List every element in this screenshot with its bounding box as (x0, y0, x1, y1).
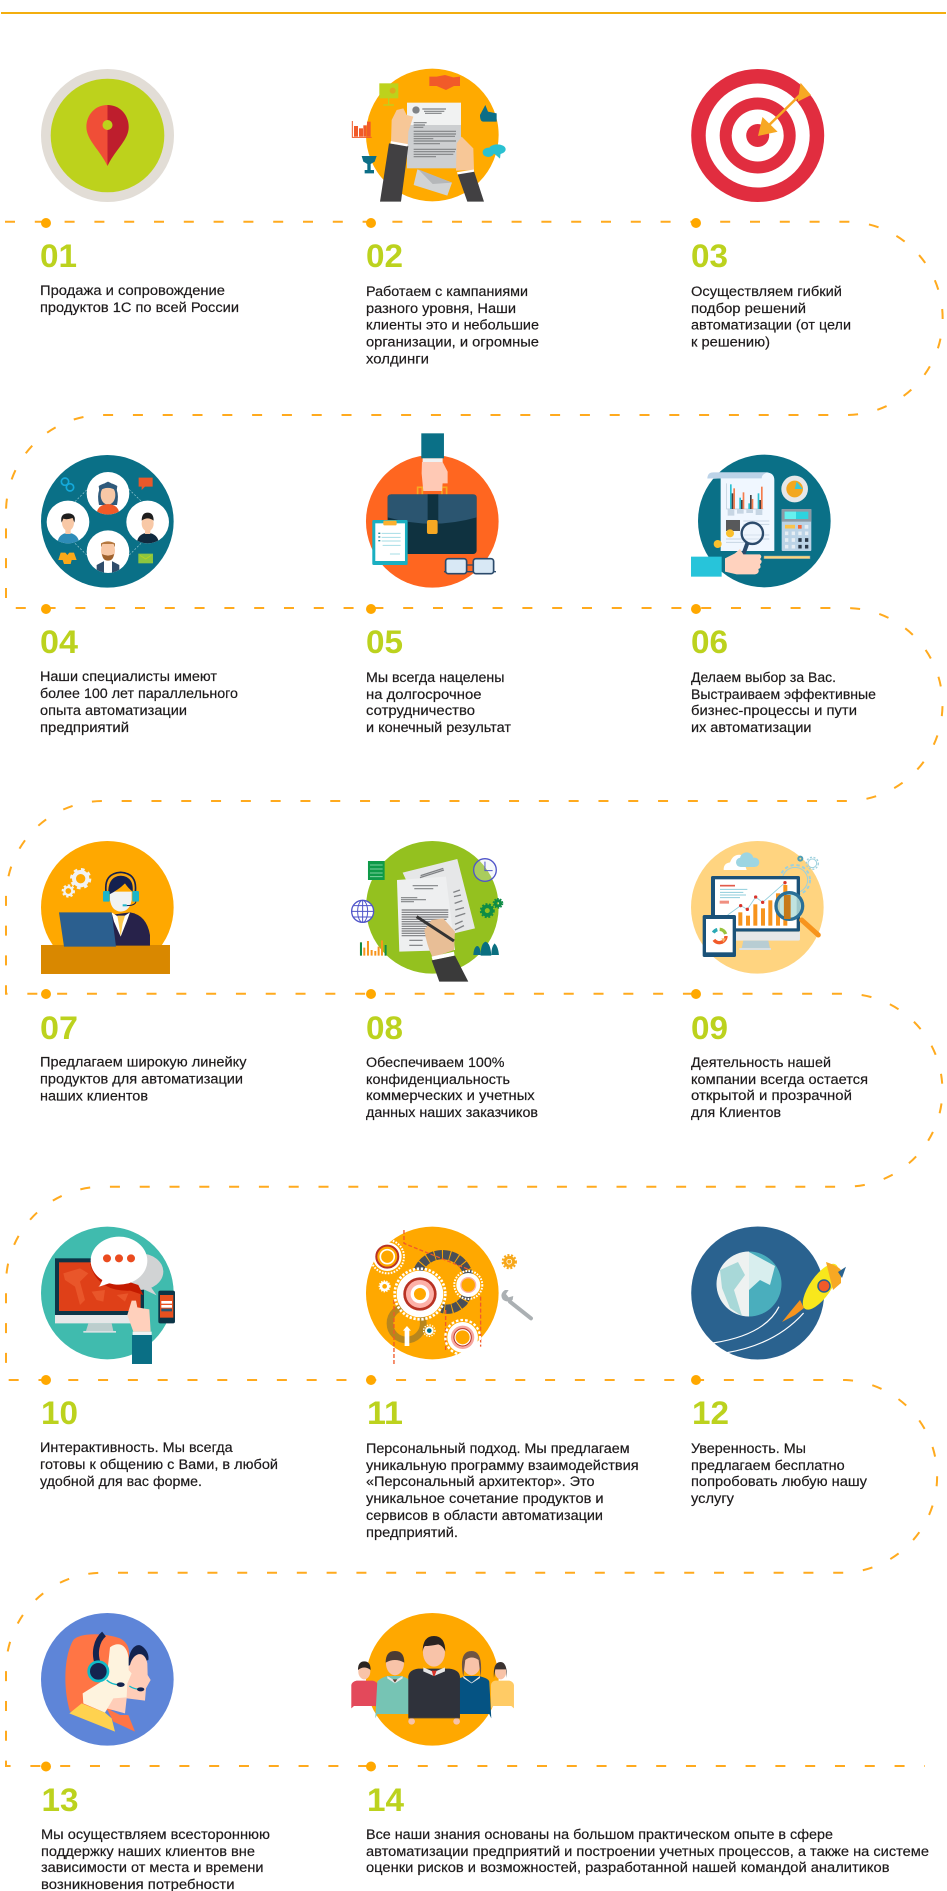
text block: наших клиентов (40, 1088, 148, 1103)
timeline dot (41, 1375, 51, 1385)
icon: map pin (41, 69, 174, 202)
number: 11 (367, 1395, 403, 1431)
text block: продуктов 1С по всей России (40, 300, 239, 315)
text block: готовы к общению с Вами, в любой (40, 1457, 278, 1472)
panel: item 10 (40, 1227, 278, 1489)
text block (366, 1441, 639, 1540)
text block: для Клиентов (691, 1105, 781, 1120)
timeline dot (691, 989, 701, 999)
text block: и конечный результат (366, 720, 511, 735)
text block: холдинги (366, 352, 429, 366)
timeline dot (366, 604, 376, 614)
icon: contract signing (352, 841, 503, 982)
panel: item 03 (691, 69, 851, 350)
text block: Персональный подход. Мы предлагаем (366, 1441, 630, 1456)
number: 06 (691, 624, 728, 660)
text block: предприятий. (366, 1525, 458, 1540)
text block: Уверенность. Мы (691, 1441, 806, 1456)
icon: analytics report (691, 455, 831, 587)
text block: их автоматизации (691, 720, 812, 735)
text block (366, 1055, 538, 1120)
text block (691, 284, 851, 350)
text block (691, 1055, 868, 1120)
text block: Осуществляем гибкий (691, 284, 842, 299)
text block: сотрудничество (366, 703, 475, 718)
text block: сервисов в области автоматизации (366, 1508, 603, 1523)
text block: уникальное сочетание продуктов и (366, 1491, 604, 1506)
panel: item 06 (691, 455, 876, 735)
icon: document in hands (352, 69, 506, 202)
number: 12 (692, 1395, 729, 1431)
text block: Предлагаем широкую линейку (40, 1054, 247, 1069)
icon: globe and rocket (691, 1226, 846, 1360)
number: 13 (42, 1782, 78, 1818)
number: 02 (366, 238, 403, 274)
icon: briefcase (366, 433, 499, 588)
text block: Работаем с кампаниями (366, 284, 528, 299)
text block (40, 1440, 278, 1489)
text block (40, 669, 238, 735)
text block: открытой и прозрачной (691, 1088, 852, 1103)
text block: Интерактивность. Мы всегда (40, 1440, 233, 1455)
text block: Продажа и сопровождение (40, 283, 225, 298)
number: 05 (366, 624, 403, 660)
text block: компании всегда остается (691, 1072, 868, 1087)
text block: подбор решений (691, 301, 806, 316)
icon: gears (366, 1227, 531, 1365)
panel: item 02 (352, 69, 539, 366)
text block (40, 1054, 247, 1103)
number: 04 (40, 624, 78, 660)
text block: на долгосрочное (366, 687, 482, 702)
panel: item 09 (691, 841, 868, 1120)
text block: автоматизации (от цели (691, 318, 851, 332)
number: 03 (691, 238, 728, 274)
timeline dot (366, 989, 376, 999)
panel: item 01 (40, 69, 239, 315)
text block: предприятий (40, 720, 129, 735)
text block: Делаем выбор за Вас. (691, 670, 836, 685)
panel: item 07 (40, 841, 247, 1103)
icon: interactive chat on monitor (41, 1227, 175, 1364)
number: 14 (367, 1782, 404, 1818)
timeline dot (691, 218, 701, 228)
panel: item 08 (352, 841, 538, 1120)
text block: коммерческих и учетных (366, 1088, 535, 1103)
text block (41, 1827, 270, 1891)
text block (691, 670, 876, 735)
panel: item 14 (351, 1613, 929, 1875)
text block: Наши специалисты имеют (40, 669, 217, 684)
text block: предлагаем бесплатно (691, 1458, 845, 1473)
text block (40, 283, 239, 315)
text block: уникальную программу взаимодействия (366, 1458, 639, 1473)
text block (366, 670, 511, 735)
text block: оценки рисков и возможностей, разработанной нашей командой аналитиков (366, 1860, 890, 1875)
icon: support agent at laptop (41, 841, 174, 974)
panel: item 05 (366, 433, 511, 735)
text block: удобной для вас форме. (40, 1474, 202, 1489)
text block: данных наших заказчиков (366, 1105, 538, 1120)
text block: «Персональный архитектор». Это (366, 1474, 595, 1489)
text block (366, 1827, 929, 1875)
text block: Обеспечиваем 100% (366, 1055, 504, 1070)
text block: к решению) (691, 334, 770, 350)
text block: более 100 лет параллельного (40, 686, 238, 701)
number: 08 (366, 1010, 403, 1046)
text block: Выстраиваем эффективные (691, 687, 876, 702)
icon: team of five (351, 1613, 514, 1746)
text block: Мы осуществляем всестороннюю (41, 1827, 270, 1842)
timeline dot (691, 604, 701, 614)
timeline dot (691, 1375, 701, 1385)
text block: организации, и огромные (366, 334, 539, 350)
text block: Деятельность нашей (691, 1055, 831, 1070)
icon: team network (41, 455, 174, 588)
timeline dot (366, 1375, 376, 1385)
text block: клиенты это и небольшие (366, 318, 539, 332)
timeline dot (41, 1762, 51, 1772)
timeline dot (41, 604, 51, 614)
text block: бизнес-процессы и пути (691, 703, 857, 718)
text block: Мы всегда нацелены (366, 670, 504, 685)
icon: target with arrow (691, 69, 824, 202)
text block: продуктов для автоматизации (40, 1071, 243, 1086)
top rule (1, 12, 946, 14)
panel: item 13 (41, 1613, 270, 1891)
timeline dot (41, 989, 51, 999)
panel: item 12 (691, 1226, 867, 1506)
timeline dot (41, 218, 51, 228)
panel: item 04 (40, 455, 238, 735)
icon: monitor with growth chart (691, 841, 824, 974)
text block: конфиденциальность (366, 1072, 510, 1087)
text block: попробовать любую нашу (691, 1474, 867, 1489)
icon: headset operators (41, 1613, 174, 1746)
text block: Все наши знания основаны на большом практическом опыте в сфере (366, 1827, 833, 1842)
text block: опыта автоматизации (40, 703, 187, 718)
text block: автоматизации предприятий и построении учетных процессов, а также на системе (366, 1844, 929, 1859)
number: 07 (40, 1010, 78, 1046)
number: 10 (41, 1395, 78, 1431)
text block: зависимости от места и времени (41, 1860, 264, 1875)
text block (691, 1441, 867, 1506)
number: 09 (691, 1010, 728, 1046)
text block: поддержку наших клиентов вне (41, 1844, 255, 1859)
timeline dot (366, 1762, 376, 1772)
timeline dot (366, 218, 376, 228)
text block: услугу (691, 1491, 734, 1506)
text block: разного уровня, Наши (366, 301, 516, 316)
panel: item 11 (366, 1227, 639, 1540)
text block (366, 284, 539, 366)
number: 01 (40, 238, 77, 274)
